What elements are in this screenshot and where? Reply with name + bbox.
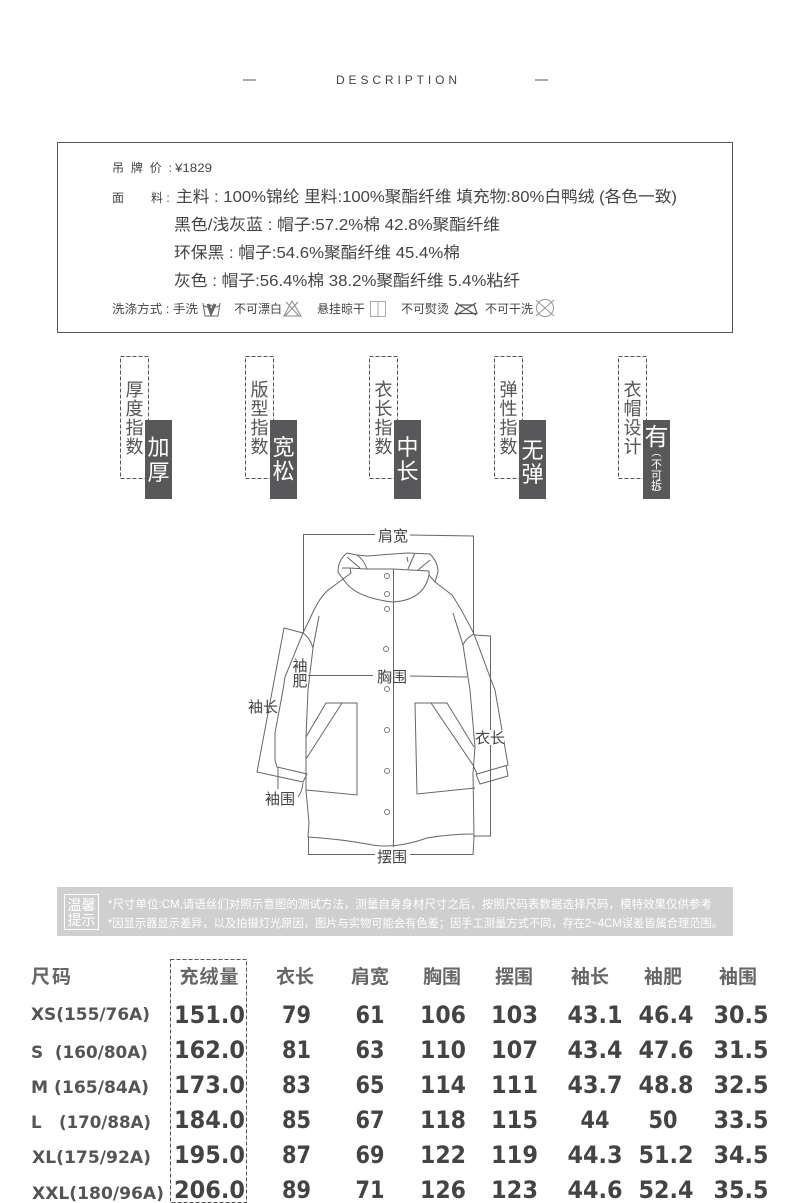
row: XL: 51.2 [638,1141,694,1169]
row: M [31,1071,768,1099]
row: XS: 30.5 [714,1001,768,1029]
coat outline [257,553,508,855]
wash instructions [112,300,554,316]
index tag: thickness: 指 [126,418,144,438]
index tag: length: 长 [396,459,419,484]
row: L [31,1106,768,1134]
index tag: length: 衣 [374,380,392,400]
icon: no dry clean [536,300,554,316]
row: S: 47.6 [638,1036,694,1064]
table header: 胸围 [423,966,461,988]
wash instructions: 不可漂白 [234,301,282,316]
row: M: M (165/84A) [31,1078,149,1098]
row: XS: 61 [356,1001,384,1029]
row: XS: 151.0 [174,1001,245,1029]
index tag: hood: ︵ [652,448,662,459]
index tag: fit: 指 [250,418,268,438]
material text: 主料 : 100%锦纶 里料:100%聚酯纤维 填充物:80%白鸭绒 (各色一致) [176,188,677,206]
row: L: 115 [491,1106,538,1134]
material text: 灰色 : 帽子:56.4%棉 38.2%聚酯纤维 5.4%粘纤 [174,272,520,290]
index tag: thickness: 度 [126,399,144,419]
index tag: length [370,356,421,499]
index tag: hood: 有 [644,424,668,451]
table header: 袖肥 [644,966,682,988]
table header: 尺码 [31,966,73,988]
row: XL: 122 [420,1141,466,1169]
index tag: length: 数 [374,437,392,457]
row: M: 43.7 [568,1071,622,1099]
index tag: elasticity: 弹 [521,462,544,487]
price text: ¥1829 [174,161,212,175]
table header: 衣长 [276,965,314,988]
index tag: fit: 数 [250,437,268,457]
price text [112,161,212,175]
index tag: hood [618,356,670,500]
material text: 料 : [151,191,170,205]
notice text [108,897,723,930]
row: XL [32,1141,768,1169]
row: XS: 46.4 [638,1001,694,1029]
row: L: 85 [282,1106,311,1134]
row: M: 111 [491,1071,538,1099]
index tag: length: 中 [396,435,419,460]
material text: 环保黑 : 帽子:54.6%聚酯纤维 45.4%棉 [174,244,460,262]
wash instructions: 不可干洗 [485,302,533,316]
table header: 肩宽 [351,965,389,988]
label: sleeve length: 袖长 [248,699,278,716]
table header: 袖长 [571,966,609,988]
row: M: 65 [356,1071,384,1099]
label: sleeve width: 袖 [292,658,308,675]
title: description: DESCRIPTION [336,73,457,87]
icon: no ironing [455,303,477,315]
row: S: S (160/80A) [31,1043,148,1063]
notice badge: 温馨 [68,897,96,913]
row: M: 32.5 [714,1071,768,1099]
label: coat length: 衣长 [475,730,505,747]
hood [338,553,438,582]
index tag: length: 长 [374,399,392,419]
label: shoulder width: 肩宽 [378,528,408,545]
row: S: 107 [491,1036,538,1064]
row: M: 83 [282,1071,311,1099]
buttons [384,574,390,814]
row: S: 110 [420,1036,466,1064]
row: L: 44 [580,1106,610,1134]
index tag: fit: 版 [250,380,268,400]
table header [31,965,757,988]
index tag: hood: 计 [624,437,642,457]
row: S [31,1036,768,1064]
row: L: 50 [648,1106,678,1134]
label: cuff: 袖围 [265,791,295,808]
row: XL: 195.0 [174,1141,245,1169]
row: L: 67 [356,1106,384,1134]
material text: 黑色/浅灰蓝 : 帽子:57.2%棉 42.8%聚酯纤维 [174,216,500,234]
notice badge [64,894,98,930]
label: hem: 摆围 [377,849,407,866]
notice badge: 提示 [68,912,96,928]
index tag: hood: ︶ [652,488,662,500]
row: L: 184.0 [174,1106,245,1134]
row: M: 173.0 [174,1071,245,1099]
index tag: elasticity [494,356,546,499]
icon: hand wash [203,303,220,316]
row: XL: XL(175/92A) [32,1148,151,1168]
label: sleeve width: 肥 [292,673,308,690]
index tag: hood: 设 [624,418,642,438]
index tag: thickness: 厚 [147,460,170,485]
row: XS: 106 [420,1001,466,1029]
icon: no bleach [284,301,301,316]
index tag: fit: 型 [250,399,268,419]
index tag: length: 指 [374,418,392,438]
index tag: hood: 拆 [651,478,662,492]
pockets [306,703,475,795]
index tag: elasticity: 弹 [500,380,518,400]
size table [31,960,768,1203]
wash instructions: 不可熨烫 [401,302,449,316]
row: XS: XS(155/76A) [31,1005,150,1025]
index tag: thickness: 加 [147,435,170,460]
row: XL: 119 [491,1141,538,1169]
row: S: 81 [282,1036,311,1064]
label: chest: 胸围 [377,669,407,686]
row: S: 31.5 [714,1036,768,1064]
wash instructions: 悬挂晾干 [317,301,365,316]
table header: 充绒量 [180,965,238,988]
row: XL: 34.5 [714,1141,768,1169]
index tag: elasticity: 性 [500,399,518,419]
index tag: hood: 可 [651,470,662,482]
row: S: 43.4 [568,1036,622,1064]
index tag: elasticity: 数 [500,437,518,457]
notice text: *尺寸单位:CM,请语丝们对照示意图的测试方法，测量自身身材尺寸之后，按照尺码表数据选择尺码，模特效果仅供参考 [108,897,712,911]
index tag: fit [246,356,297,499]
material text [112,188,677,290]
row: XS: 43.1 [568,1001,622,1029]
row: XL: 44.3 [568,1141,622,1169]
row: M: 48.8 [638,1071,694,1099]
row: XS: 79 [282,1001,311,1029]
wash instructions: 洗涤方式 : 手洗 [112,301,198,316]
measurement lines [278,534,490,854]
row: S: 63 [356,1036,384,1064]
row: XL: 87 [282,1141,311,1169]
index tag: fit: 松 [272,459,295,484]
index tag: thickness: 数 [126,437,144,457]
material text: 面 [112,191,124,205]
row: L: 118 [420,1106,466,1134]
index tag: hood: 不 [651,459,662,471]
panel: product details [58,142,732,332]
index tag: thickness [120,356,172,499]
row: XS [31,1001,768,1029]
highlight box [170,960,246,1202]
notice banner [57,887,733,936]
notice text: *因显示器显示差异，以及拍摄灯光原因，图片与实物可能会有色差；因手工测量方式不同，存在2~4CM误差皆属合理范围。 [108,916,723,930]
index tag: hood: 衣 [624,380,642,400]
table header: 摆围 [495,966,533,988]
row: XL: 69 [356,1141,384,1169]
index tag: hood: 帽 [624,399,642,419]
row: XS: 103 [491,1001,538,1029]
index tag: elasticity: 指 [500,418,518,438]
diagram: coat measurements [248,528,508,866]
icon: hang dry [370,301,386,316]
table header: 袖围 [719,966,757,988]
price text: 吊 牌 价 : [112,161,172,175]
row: M: 114 [420,1071,466,1099]
index tag: elasticity: 无 [521,438,544,463]
label: sleeve width [292,658,308,690]
row: S: 162.0 [174,1036,245,1064]
index tag: thickness: 厚 [126,380,144,400]
row: XXL [32,1176,768,1203]
index tag: fit: 宽 [272,435,295,460]
row: L: 33.5 [714,1106,768,1134]
row: L: L (170/88A) [31,1113,151,1133]
